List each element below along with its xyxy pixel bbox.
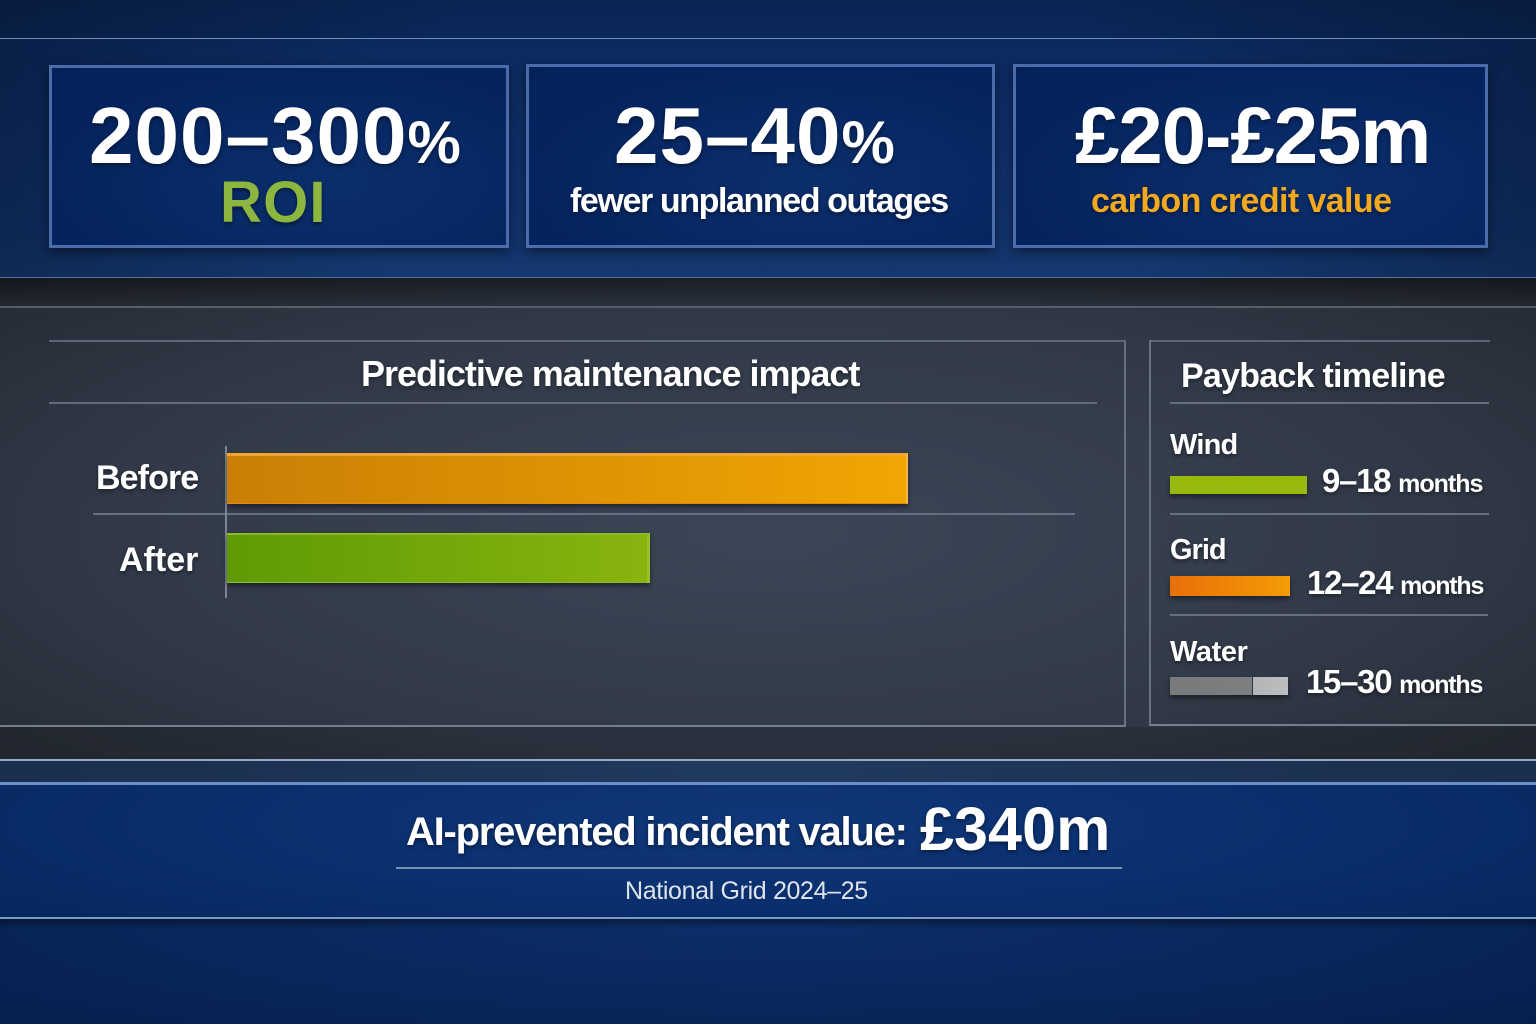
background: top band — [0, 39, 1536, 278]
panel: predictive maintenance impact — [0, 340, 1126, 727]
background: middle dark band — [0, 278, 1536, 782]
outages value: 25–40% — [614, 91, 895, 180]
panel: carbon credit card — [1013, 64, 1488, 248]
source note: National Grid 2024–25 — [625, 877, 868, 905]
background: bottom band — [0, 782, 1536, 918]
bar chart: before and after — [93, 446, 1075, 598]
callout value: £340m — [920, 795, 1110, 863]
panel: payback timeline — [1149, 340, 1536, 726]
water label: Water — [1170, 636, 1248, 668]
background: top strip — [0, 0, 1536, 39]
payback heading: Payback timeline — [1181, 357, 1445, 395]
panel: outages card — [526, 64, 995, 248]
label: after: After — [119, 541, 198, 579]
callout: AI-prevented incident value — [396, 795, 1122, 905]
label: before: Before — [96, 459, 198, 497]
grid label: Grid — [1170, 534, 1226, 566]
carbon value: £20-£25m — [1075, 91, 1430, 180]
row: wind — [1168, 429, 1483, 499]
outages label: fewer unplanned outages — [570, 182, 948, 220]
bar: before — [227, 453, 908, 504]
row: water — [1168, 636, 1483, 700]
panel: ROI card — [49, 65, 509, 248]
carbon label: carbon credit value — [1091, 182, 1391, 220]
wind value: 9–18 months — [1322, 462, 1482, 499]
water value: 15–30 months — [1306, 663, 1482, 700]
wind bar — [1170, 476, 1307, 494]
grid bar — [1170, 576, 1290, 596]
water bar — [1170, 677, 1288, 695]
row: grid — [1168, 534, 1484, 601]
ROI label: ROI — [220, 170, 327, 235]
grid value: 12–24 months — [1307, 564, 1483, 601]
background: footer — [0, 918, 1536, 1024]
ROI value: 200–300% — [89, 91, 461, 180]
callout text: AI-prevented incident value: — [406, 810, 907, 854]
chart heading: Predictive maintenance impact — [361, 353, 859, 394]
wind label: Wind — [1170, 429, 1237, 461]
bar: after — [227, 533, 650, 583]
